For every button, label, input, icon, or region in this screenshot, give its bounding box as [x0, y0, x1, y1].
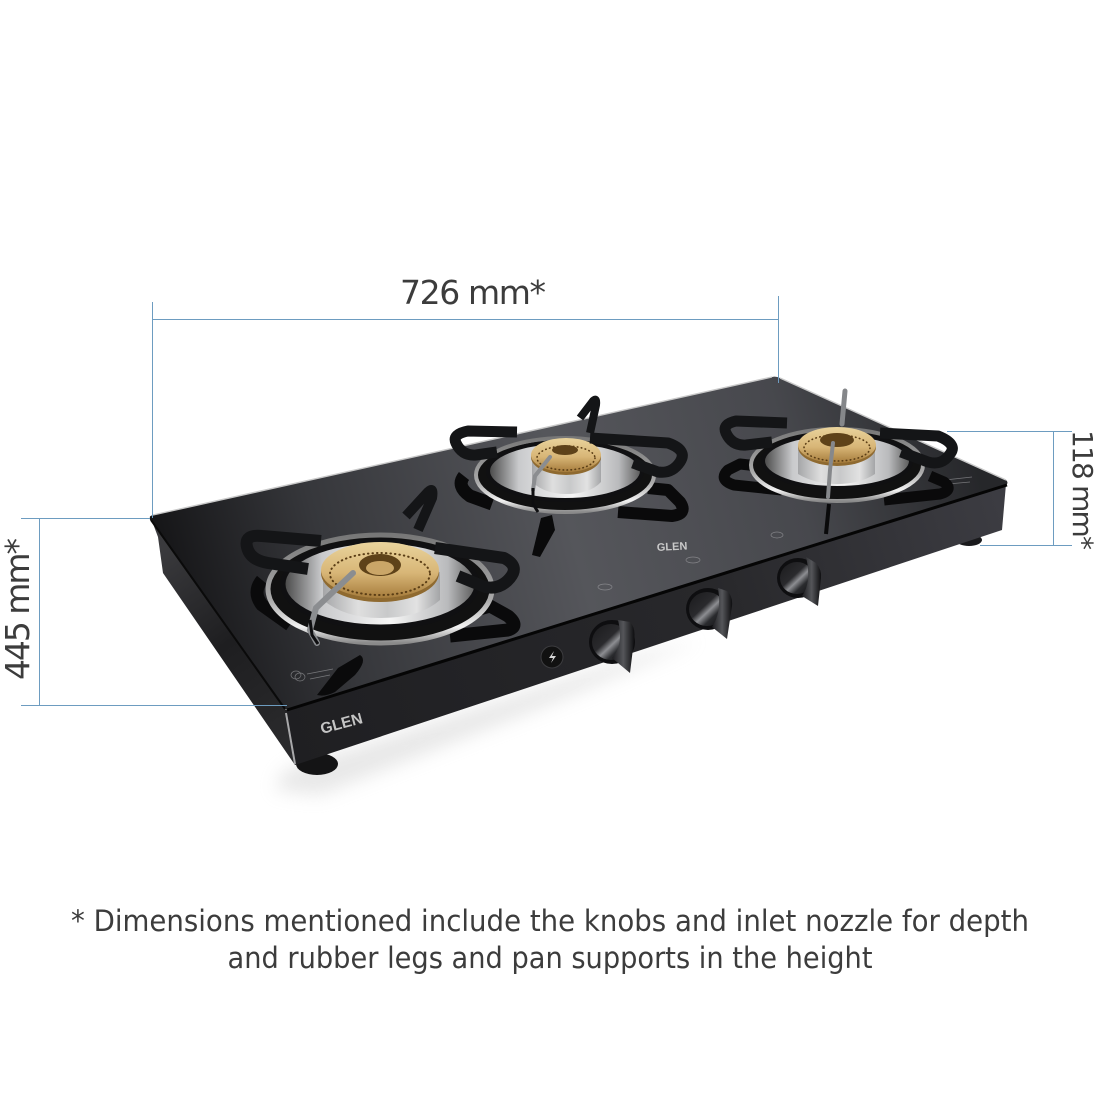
- ring: [476, 438, 654, 512]
- footnote: [71, 904, 1029, 975]
- ignition button: [541, 646, 563, 668]
- glass left edge: [151, 520, 285, 709]
- pan support arms: [247, 536, 321, 569]
- steel support: [310, 573, 353, 643]
- footnote: and rubber legs and pan supports in the height: [228, 941, 872, 975]
- steel support: [828, 443, 833, 497]
- chrome base: [532, 458, 601, 494]
- footnote: * Dimensions mentioned include the knobs and inlet nozzle for depth: [71, 904, 1029, 938]
- glass top: [150, 377, 1008, 709]
- brass head: [321, 544, 439, 602]
- dimension: height 118 mm: 118 mm*: [1066, 430, 1099, 550]
- burner: right: [724, 391, 952, 534]
- knob 3: [777, 557, 821, 606]
- burner: middle: [455, 400, 683, 557]
- ring: [751, 429, 923, 501]
- brass head: [531, 439, 601, 475]
- reflections: [257, 580, 514, 696]
- glass front edge: [287, 485, 1007, 710]
- chrome base: [798, 450, 875, 484]
- chrome base: [323, 572, 440, 618]
- reflections: [461, 476, 683, 557]
- legs: [296, 534, 982, 775]
- back steel prong: [842, 391, 845, 424]
- floor shadow: [275, 640, 700, 795]
- body left side: [152, 521, 295, 765]
- cooktop: [150, 377, 1008, 795]
- marks on glass: [291, 477, 972, 681]
- steel support: [533, 457, 550, 490]
- dimension: width 726 mm: 726 mm*: [400, 273, 546, 312]
- dimension: height 118 mm: [947, 430, 1099, 550]
- dimension: depth 445 mm: [0, 518, 287, 706]
- brass head: [798, 428, 876, 466]
- body front panel: [285, 484, 1006, 765]
- body corner highlight: [286, 713, 295, 764]
- knob 2: [686, 588, 732, 639]
- brand GLEN top: GLEN: [657, 540, 688, 554]
- glass back edge highlight: [153, 377, 1006, 515]
- brand GLEN front: GLEN: [319, 710, 365, 738]
- burner: left: [247, 490, 514, 696]
- pan support arms: [455, 431, 517, 455]
- pan support arms: [725, 421, 787, 445]
- dimension: width 726 mm: [152, 273, 778, 518]
- knob 1: [589, 620, 635, 673]
- ring: [268, 535, 492, 643]
- reflections: [724, 464, 948, 534]
